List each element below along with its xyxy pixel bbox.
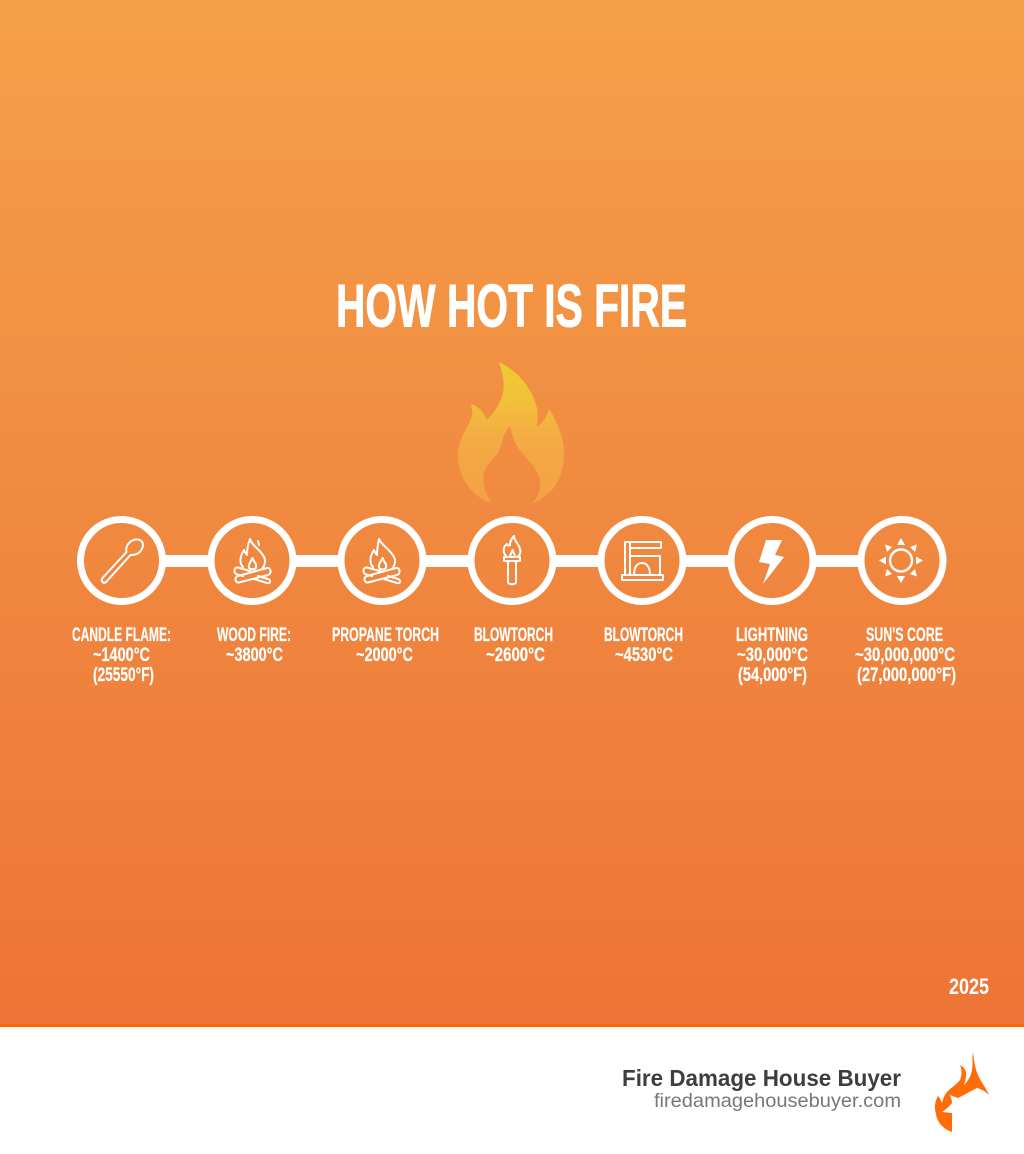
label: wood fire: ~3800°C (226, 645, 283, 666)
node ring 4 (471, 520, 553, 602)
brand name: Fire Damage House Buyer (622, 1065, 901, 1091)
white footer band (0, 1027, 1024, 1154)
brand url: firedamagehousebuyer.com (654, 1090, 901, 1112)
label: wood fire (217, 625, 291, 666)
icon: lightning bolt (759, 540, 784, 584)
label: candle flame (72, 625, 171, 686)
label: sun's core: ~30,000,000°C (855, 645, 955, 666)
node ring 7 (861, 520, 943, 602)
label: propane torch (332, 625, 439, 666)
title: HOW HOT IS FIRE (336, 272, 687, 340)
label: sun's core: SUN'S CORE (866, 625, 943, 646)
label: sun's core: (27,000,000°F) (857, 665, 956, 686)
node ring 1 (80, 520, 162, 602)
label: blowtorch (474, 625, 553, 666)
icon: central flame (458, 362, 564, 503)
icon: campfire (234, 539, 271, 583)
label: blowtorch second (604, 625, 683, 666)
label: candle flame: CANDLE FLAME: (72, 625, 171, 646)
label: sun's core (855, 625, 956, 686)
label: blowtorch second: BLOWTORCH (604, 625, 683, 646)
icon: campfire (363, 539, 400, 583)
node ring 5 (601, 520, 683, 602)
label: blowtorch second: ~4530°C (615, 645, 673, 666)
label: candle flame: (25550°F) (93, 665, 154, 686)
timeline step 2: wood fire (211, 520, 293, 666)
timeline step 1: candle flame (72, 520, 171, 686)
timeline step 4: blowtorch (471, 520, 553, 666)
label: lightning: ~30,000°C (737, 645, 808, 666)
icon: brand flame logo (935, 1052, 989, 1132)
label: blowtorch: ~2600°C (486, 645, 545, 666)
timeline step 5: furnace blowtorch (601, 520, 683, 666)
timeline step 7: sun core (855, 520, 956, 686)
label: lightning: (54,000°F) (738, 665, 807, 686)
year: 2025 (949, 974, 989, 999)
icon: match (102, 539, 143, 583)
label: lightning (736, 625, 808, 686)
label: wood fire: WOOD FIRE: (217, 625, 291, 646)
timeline connector segments (163, 555, 861, 567)
node ring 3 (341, 520, 423, 602)
label: propane torch: ~2000°C (356, 645, 413, 666)
node ring 6 (731, 520, 813, 602)
label: blowtorch: BLOWTORCH (474, 625, 553, 646)
label: lightning: LIGHTNING (736, 625, 808, 646)
timeline step 3: propane torch (332, 520, 439, 666)
label: candle flame: ~1400°C (93, 645, 150, 666)
footer accent line (0, 1024, 1024, 1027)
node ring 2 (211, 520, 293, 602)
label: propane torch: PROPANE TORCH (332, 625, 439, 646)
icon: torch (504, 536, 520, 584)
timeline step 6: lightning (731, 520, 813, 686)
icon: furnace (622, 542, 663, 580)
icon: sun (879, 538, 923, 583)
